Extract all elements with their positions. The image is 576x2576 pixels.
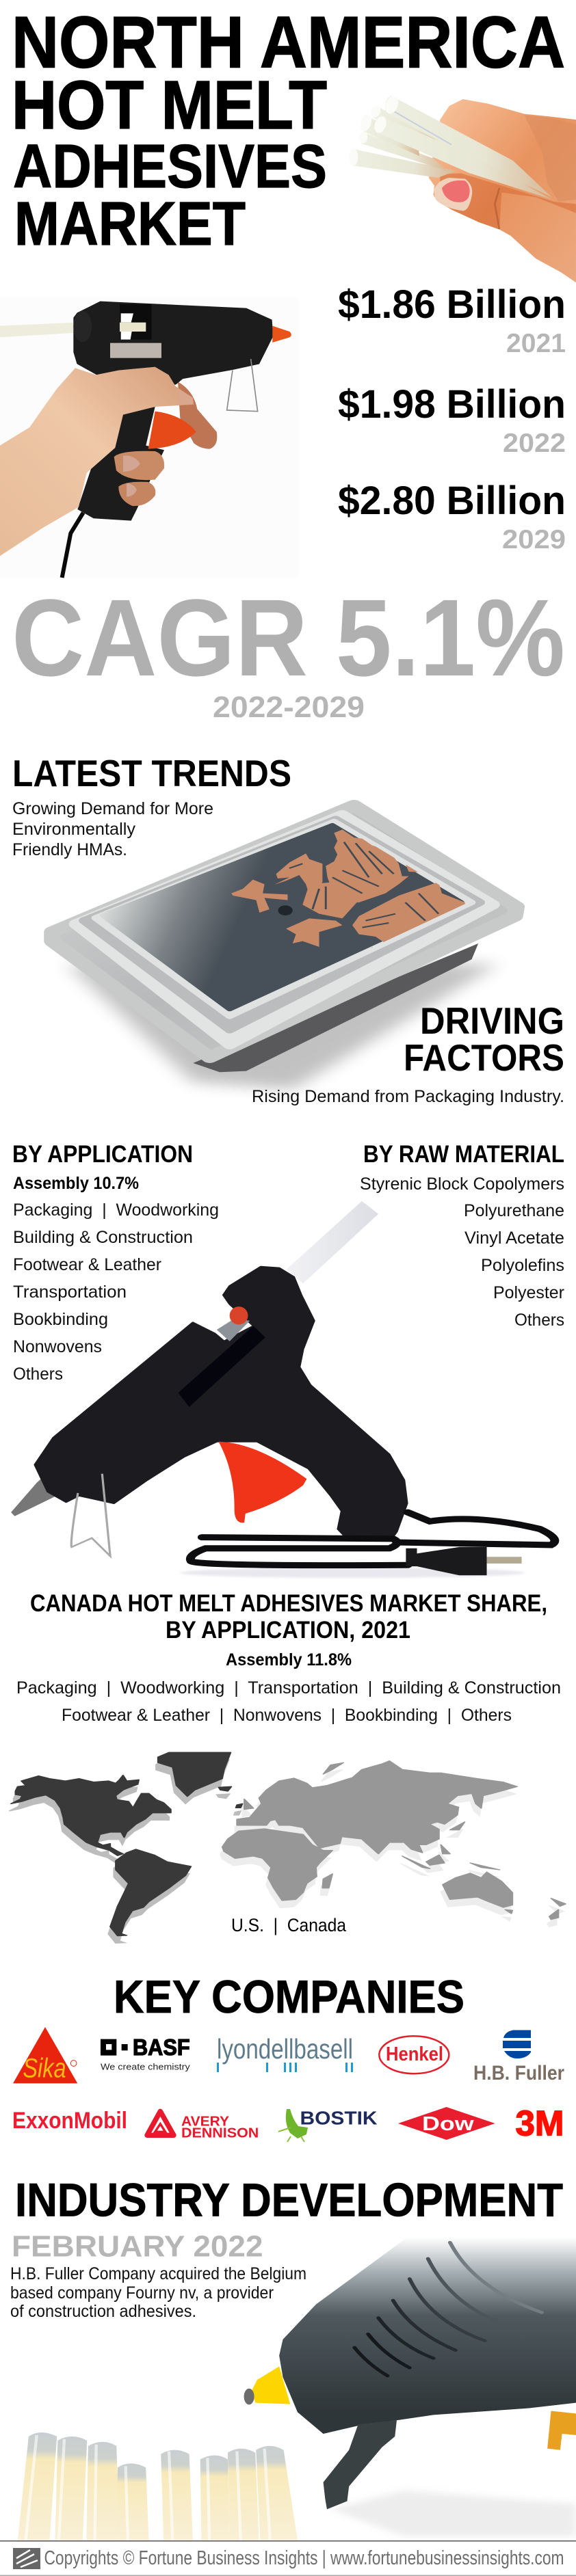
by application: Building & Construction [13,1228,193,1247]
by raw material: Polyolefins [481,1256,564,1275]
logo: ExxonMobil: ExxonMobil [12,2108,127,2134]
market value stats: $1.86 Billion [338,282,566,327]
image: glue gun and sticks [18,2234,576,2540]
world map [9,1752,566,1943]
logo: Henkel [379,2036,449,2074]
rest of world [222,1761,566,1920]
wire stand [71,1474,110,1556]
by application: Bookbinding [13,1310,108,1329]
logo: BASF: We create chemistry [101,2061,190,2071]
logo: H.B. Fuller: H.B. Fuller [473,2062,564,2084]
trends text: Environmentally [12,820,136,839]
latest trends heading: LATEST TRENDS [12,752,291,794]
by application: Footwear & Leather [13,1255,161,1274]
key companies heading: KEY COMPANIES [114,1971,464,2023]
by application: Assembly 10.7% [13,1174,139,1193]
by raw material: Styrenic Block Copolymers [360,1175,564,1194]
main hand [0,367,194,556]
wire stand [227,359,258,412]
development text [10,2230,306,2321]
by raw material: Others [514,1311,564,1330]
image: hand using glue gun [0,297,299,578]
by application: Nonwovens [13,1337,102,1356]
logo: Bostik [278,2107,378,2142]
CAGR: 2022-2029 [213,690,365,724]
yellow nozzle [252,2366,290,2404]
outer rim [52,805,516,1058]
glue stick [287,1201,378,1283]
market value stats [338,282,566,554]
title: HOT MELT [12,67,327,144]
window [120,304,152,340]
market value stats: $1.98 Billion [338,382,566,427]
nozzle [11,1477,57,1516]
trigger [148,412,196,449]
trends text [12,799,213,859]
market value stats: 2021 [506,329,566,358]
griffin [231,829,465,956]
development text: H.B. Fuller Company acquired the Belgium [10,2264,306,2283]
map shadow: Americas [9,1760,241,1943]
canada market share: Footwear & Leather | Nonwovens | Bookbinding | Others [62,1706,512,1725]
nozzle [272,326,291,343]
canada market share: Assembly 11.8% [226,1650,352,1669]
development text: FEBRUARY 2022 [12,2230,263,2263]
driving factors: DRIVING [420,999,564,1042]
logo: LyondellBasell: lyondellbasell [217,2033,353,2065]
logo: Avery Dennison: DENNISON [181,2126,259,2141]
cord [62,513,83,578]
map shadow: rest of world [220,1768,564,1927]
logo: Henkel: Henkel [386,2043,443,2065]
market value stats: $2.80 Billion [338,479,566,523]
logo: Bostik: BOSTIK [300,2107,378,2129]
logo: Sika [13,2027,77,2083]
by application: BY APPLICATION [12,1141,193,1168]
footer [0,2540,576,2576]
handle [77,407,164,521]
gun body [74,302,272,384]
orange trigger [547,2411,576,2450]
thumb nail [434,178,472,211]
canada market share [16,1590,561,1725]
plug [406,1547,487,1575]
logo: Avery Dennison: AVERY [181,2114,229,2129]
by application: Others [13,1365,63,1384]
title [12,1,565,258]
by raw material: Vinyl Acetate [464,1229,564,1248]
driving factors: Rising Demand from Packaging Industry. [252,1087,564,1106]
by raw material: Polyurethane [464,1201,564,1220]
title: MARKET [14,190,246,258]
footer logo [13,2548,40,2569]
glue channel [217,1318,250,1341]
north america highlighted [11,1752,242,1936]
image: black glue gun [11,1201,555,1578]
by raw material: Polyester [493,1283,564,1302]
title: ADHESIVES [13,133,327,201]
lid artwork [103,825,461,1009]
label plate [110,343,161,358]
by raw material [360,1141,564,1330]
by application: Transportation [13,1283,127,1302]
logo: Sika: Sika [23,2053,66,2083]
trends text: Friendly HMAs. [12,840,127,859]
canada market share: Packaging | Woodworking | Transportation | Building & Construction [16,1678,561,1698]
market value stats: 2022 [503,429,566,458]
gun body [279,2234,576,2434]
power cord [190,1512,555,1566]
image: hand holding glue sticks [349,94,576,282]
countries label: U.S. | Canada [231,1915,347,1935]
trends text: Growing Demand for More [12,799,213,818]
market value stats: 2029 [502,525,566,554]
logo: BASF: BASF [133,2035,190,2061]
image: packaging tray [52,805,516,1089]
table shadow [330,2491,576,2536]
logo: 3M: 3M [516,2104,564,2144]
logo: BASF [101,2035,190,2071]
lower fingers [114,451,164,480]
logo: LyondellBasell [217,2033,353,2072]
rear fingers [178,381,217,449]
vents [354,2242,542,2376]
gun body [35,1267,407,1537]
logo: Dow [398,2107,495,2140]
logo: Avery Dennison [147,2111,259,2141]
development text: based company Fourny nv, a provider [10,2283,274,2303]
by application [12,1141,219,1384]
black panel [178,1326,265,1407]
logo: H.B. Fuller [473,2030,564,2084]
driving factors [252,999,564,1106]
by application: Packaging | Woodworking [13,1200,219,1220]
kickstand [324,2420,397,2509]
canada market share: BY APPLICATION, 2021 [166,1617,410,1643]
tray base [193,943,478,1072]
trigger [219,1442,306,1522]
glue sticks [350,96,552,200]
logo: Dow: Dow [422,2113,475,2135]
development text: of construction adhesives. [10,2302,196,2321]
glue sticks row [18,2432,298,2540]
